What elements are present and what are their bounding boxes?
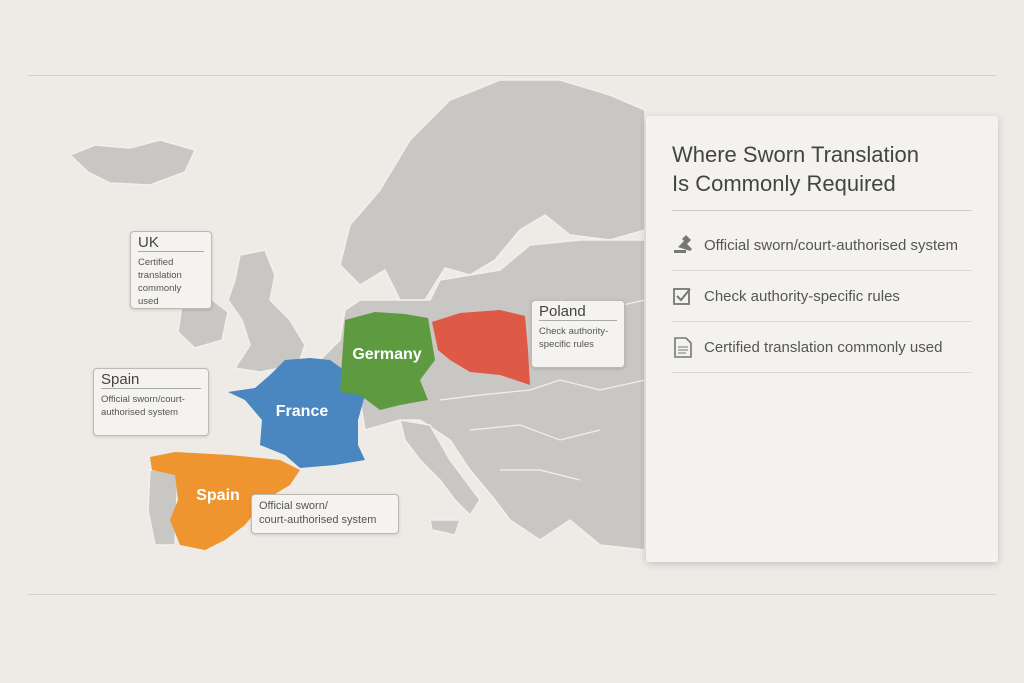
eastern mainland (320, 240, 645, 550)
map of Europe: France (276, 403, 328, 420)
row: sworn (672, 220, 972, 271)
callout: Poland (531, 300, 625, 368)
scandinavia (340, 80, 645, 300)
Spain (150, 452, 300, 550)
Germany (340, 312, 435, 410)
callout: Spain right: court-authorised system (259, 514, 376, 526)
callout: Spain left (93, 368, 209, 436)
italy (400, 420, 480, 515)
France (228, 358, 365, 468)
callout: Spain left: Spain (101, 371, 139, 388)
ireland (178, 298, 228, 348)
title: Is Commonly Required (672, 171, 896, 196)
map of Europe: Spain (196, 487, 240, 504)
callout: UK: Certified translation commonly used (138, 257, 182, 307)
title (672, 142, 919, 196)
row: sworn: Official sworn/court-authorised system (704, 236, 958, 254)
portugal (148, 470, 178, 545)
callout: Spain right (251, 494, 399, 534)
callout: Poland: Check authority-specific rules (539, 326, 608, 350)
callout: Spain right: Official sworn/ (259, 500, 328, 512)
row: certified (672, 322, 972, 373)
callout: UK (130, 231, 212, 309)
row: check: Check authority-specific rules (704, 288, 900, 304)
callout: Spain left: Official sworn/court-authorised system (101, 394, 185, 418)
callout: UK: UK (138, 234, 159, 251)
map of Europe (72, 80, 644, 550)
row: certified: Certified translation commonly used (704, 338, 942, 356)
Poland (432, 310, 530, 385)
callout: Poland: Poland (539, 303, 586, 320)
uk (228, 250, 305, 372)
row: check (672, 271, 972, 322)
legend panel (646, 116, 998, 562)
iceland (70, 140, 195, 185)
title: Where Sworn Translation (672, 142, 919, 167)
map of Europe: Germany (352, 346, 422, 363)
